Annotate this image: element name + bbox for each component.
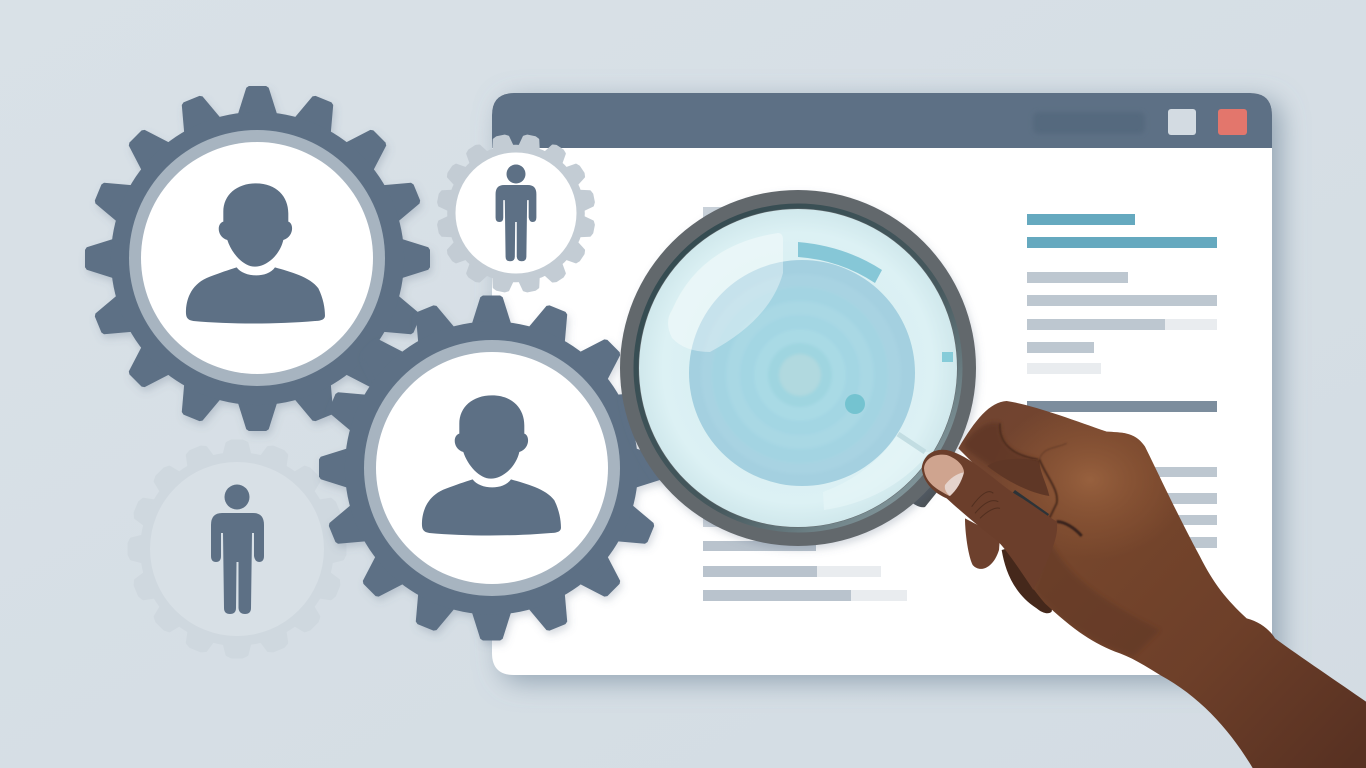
little finger [965,518,1000,569]
back of hand and wrist [958,401,1366,768]
icon: small gear with person [424,121,608,306]
lens teal dot [845,394,865,414]
icon: large gear with person, top [85,86,430,431]
icon: faded gear with person [129,441,345,657]
magnifier handle stub [905,466,950,507]
lens teal square [942,352,953,362]
text lines: left column [703,207,907,601]
icon: large gear with person, bottom [319,296,664,640]
lower curled finger [1002,547,1057,613]
panel: browser window [492,93,1272,675]
window title bar [492,93,1272,148]
magnifier rim [620,190,976,546]
thumb knuckle creases [972,492,1000,518]
thumbnail [924,455,964,496]
lens rings [689,260,915,486]
text lines: right column [1027,214,1217,548]
lens glass [639,209,957,527]
icon: hand holding magnifier [922,400,1366,768]
icon: magnifying glass [620,190,976,546]
hand shading [963,400,1190,657]
curled fingers [987,459,1049,496]
lens lower reflection [823,434,930,510]
lens highlight [668,233,783,352]
lens teal arc [798,242,882,283]
thumb [922,450,1057,590]
